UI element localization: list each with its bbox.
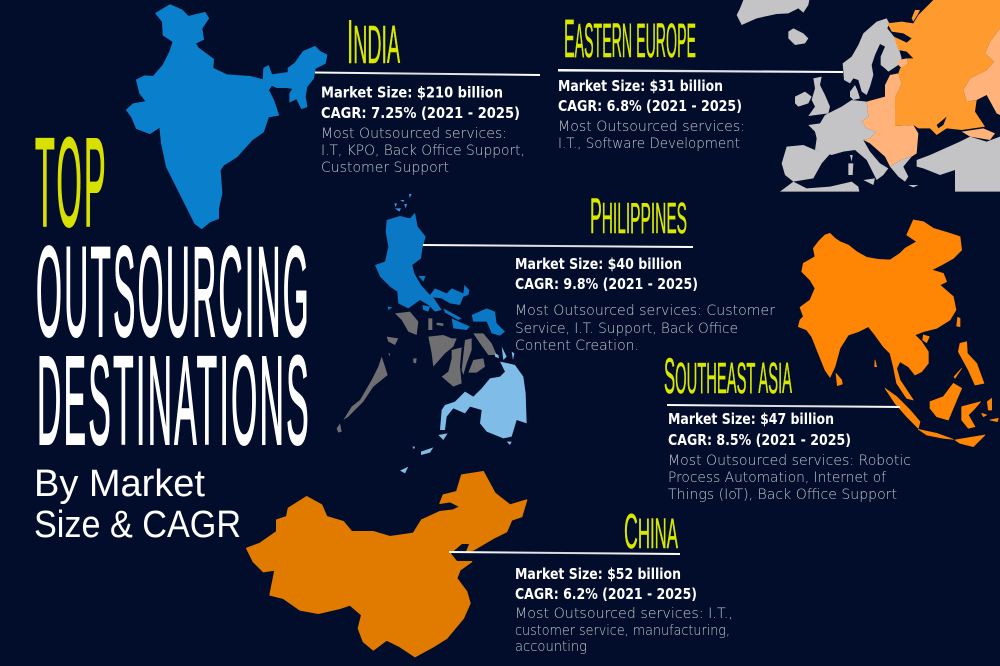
services: Southeast Asia — [668, 453, 911, 503]
leader line: India — [315, 72, 540, 76]
title: TOP — [35, 112, 108, 253]
map: India — [127, 5, 327, 228]
services: Philippines: Service, I.T. Support, Back Office — [515, 321, 738, 337]
stats: Southeast Asia — [668, 410, 851, 449]
services: Eastern Europe — [558, 119, 745, 152]
stats: China — [515, 565, 697, 603]
map: China — [247, 472, 527, 657]
callout: India: INDIA — [347, 8, 400, 77]
title — [35, 112, 311, 471]
map: Europe — [737, 0, 1000, 192]
stats: China: CAGR: 6.2% (2021 - 2025) — [515, 585, 697, 603]
services: Philippines: Content Creation. — [515, 338, 639, 354]
services: Eastern Europe: Most Outsourced services: — [558, 119, 745, 135]
callout: Eastern Europe — [558, 9, 843, 152]
services: India: Most Outsourced services: — [321, 126, 507, 142]
stats: Southeast Asia: CAGR: 8.5% (2021 - 2025) — [668, 431, 851, 449]
services: Southeast Asia: Process Automation, Internet of — [668, 470, 887, 486]
leader line: Southeast Asia — [667, 404, 900, 408]
leader line: China — [449, 551, 680, 555]
subtitle: Size & CAGR — [34, 504, 241, 546]
stats: India: Market Size: $210 billion — [321, 84, 503, 102]
services: India — [321, 126, 525, 176]
callout: Philippines: PHILIPPINES — [590, 188, 687, 244]
stats: China: Market Size: $52 billion — [515, 565, 681, 583]
leader line: Philippines — [423, 244, 693, 248]
subtitle: By Market — [34, 463, 205, 505]
callout: India — [315, 8, 540, 176]
callout: China — [449, 505, 733, 655]
services: China: accounting — [515, 639, 587, 655]
stats: Southeast Asia: Market Size: $47 billion — [668, 410, 834, 428]
map: Philippines — [337, 194, 527, 473]
services: Philippines: Most Outsourced services: Customer — [515, 303, 775, 319]
services: Southeast Asia: Things (IoT), Back Office Support — [668, 487, 897, 503]
callout: China: CHINA — [624, 505, 678, 559]
callout: Eastern Europe: EASTERN EUROPE — [564, 9, 696, 69]
stats: Philippines: Market Size: $40 billion — [515, 255, 682, 273]
services: India: Customer Support — [321, 160, 449, 176]
stats: Philippines: CAGR: 9.8% (2021 - 2025) — [515, 275, 698, 293]
map: Southeast Asia — [798, 220, 998, 447]
stats: India — [321, 84, 520, 122]
services: China: customer service, manufacturing, — [515, 623, 730, 639]
services: Philippines — [515, 303, 775, 354]
callout: Philippines — [423, 188, 775, 354]
leader line: Eastern Europe — [558, 69, 843, 73]
stats: Philippines — [515, 255, 698, 293]
services: Eastern Europe: I.T., Software Development — [558, 136, 740, 152]
services: Southeast Asia: Most Outsourced services: Robotic — [668, 453, 911, 469]
stats: Eastern Europe: CAGR: 6.8% (2021 - 2025) — [558, 97, 742, 115]
stats: India: CAGR: 7.25% (2021 - 2025) — [321, 104, 520, 122]
services: China — [515, 606, 733, 655]
callout: Southeast Asia — [664, 348, 911, 503]
services: India: I.T, KPO, Back Office Support, — [321, 143, 525, 159]
stats: Eastern Europe — [558, 77, 742, 115]
subtitle — [34, 463, 241, 546]
stats: Eastern Europe: Market Size: $31 billion — [558, 77, 723, 95]
services: China: Most Outsourced services: I.T., — [515, 606, 733, 622]
